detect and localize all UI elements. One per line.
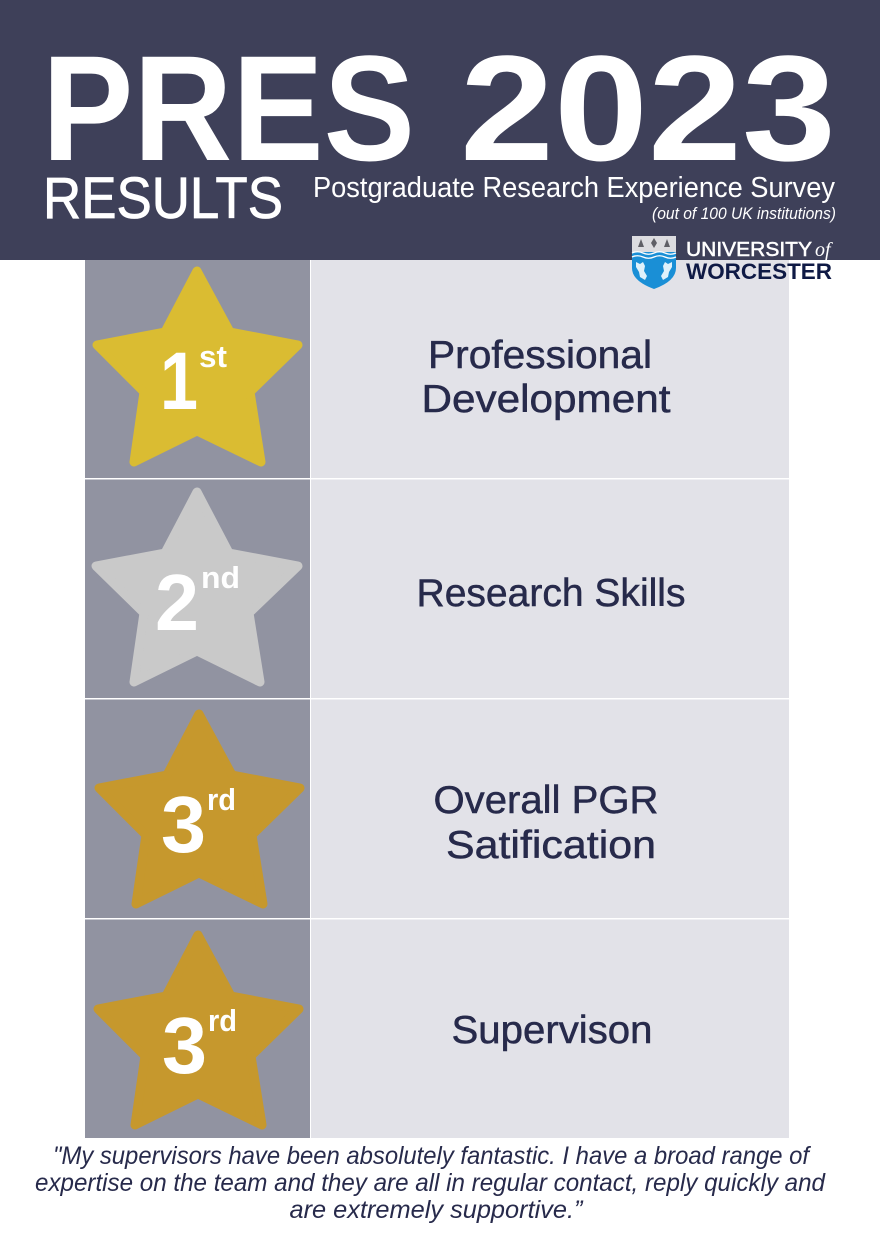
- icon: silver star: [96, 492, 298, 682]
- icon: bronze star: [98, 935, 299, 1125]
- label: Supervison: [452, 1009, 652, 1052]
- rank: 3rd: 3: [161, 780, 206, 869]
- label: Overall PGR: [434, 779, 658, 822]
- quote: are extremely supportive.”: [290, 1196, 584, 1224]
- row 3: overall PGR satisfaction: [99, 714, 658, 904]
- rank: 2nd: 2: [155, 558, 199, 647]
- icon: bronze star: [99, 714, 300, 904]
- label: Research Skills: [416, 572, 686, 615]
- logo: University of Worcester: [632, 236, 833, 289]
- row 1: professional development: [97, 271, 671, 462]
- survey name: Postgraduate Research Experience Survey: [313, 172, 835, 204]
- survey note: (out of 100 UK institutions): [652, 205, 836, 223]
- title: PRES: [42, 24, 415, 192]
- rank suffix: st: [199, 339, 227, 374]
- logo wordmark top: UNIVERSITY: [686, 239, 812, 261]
- row 4: supervision: [98, 935, 652, 1125]
- label line 2: Development: [422, 378, 671, 421]
- logo wordmark of: of: [815, 239, 833, 261]
- row 2: research skills: [96, 492, 686, 682]
- title: [42, 24, 836, 192]
- icon: gold star: [97, 271, 298, 462]
- quote: "My supervisors have been absolutely fantastic. I have a broad range of: [53, 1142, 812, 1170]
- title: 2023: [460, 24, 836, 192]
- quote: expertise on the team and they are all in regular contact, reply quickly and: [35, 1169, 826, 1197]
- header banner: [0, 0, 880, 260]
- subtitle: results: RESULTS: [43, 166, 283, 231]
- rank: 1st: 1: [160, 336, 198, 427]
- rank suffix: nd: [201, 560, 240, 595]
- rank: 3rd: 3: [162, 1001, 207, 1090]
- logo wordmark bottom: WORCESTER: [686, 259, 832, 284]
- panel: rankings table: [85, 260, 789, 1138]
- label: Professional: [428, 334, 652, 377]
- quote: [35, 1142, 826, 1224]
- label line 2: Satification: [446, 824, 656, 867]
- rank suffix: rd: [207, 782, 236, 817]
- rank suffix: rd: [208, 1003, 237, 1038]
- icon: crest: [632, 236, 676, 289]
